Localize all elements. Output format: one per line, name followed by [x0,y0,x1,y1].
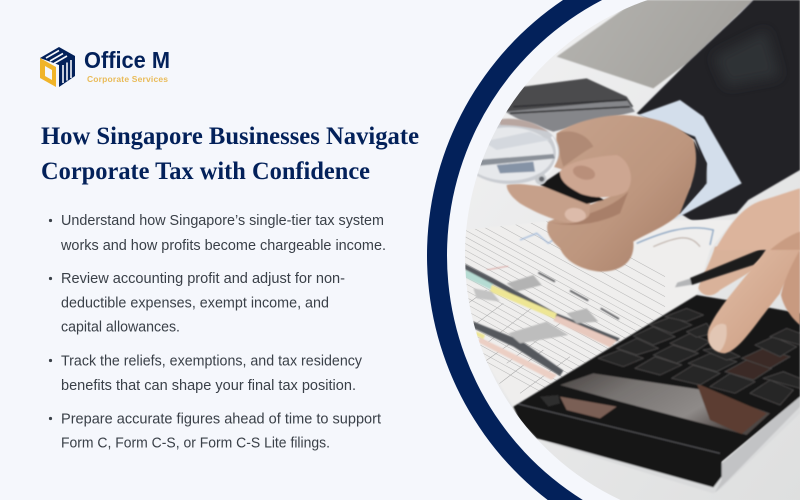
logo [40,47,170,87]
desk [466,0,800,500]
bullet 1 [49,213,386,254]
sketch charts on paper [520,228,713,247]
palm and lower fingers [547,115,696,272]
knuckle crease [557,131,593,167]
title [41,123,419,185]
display [560,373,770,435]
bullet 2: capital allowances. [61,320,180,336]
upper hand [715,188,800,250]
index finger [708,248,800,353]
title: How Singapore Businesses Navigate [41,123,419,150]
magnifier handle [540,172,604,204]
index finger [507,184,590,223]
navy arc [427,0,602,500]
wrist shadow [678,140,708,214]
bullet 2: deductible expenses, exempt income, and [61,296,329,312]
back finger [698,247,767,295]
company name: Office M [84,47,170,73]
icon: logo cube [40,47,75,87]
bullet 2: Review accounting profit and adjust for non- [61,271,345,287]
bullet list [49,213,386,452]
title: Corporate Tax with Confidence [41,158,370,185]
magnifier lens [477,118,560,186]
finger gap shadow [560,193,628,225]
red mark [487,266,508,270]
bullet 3: Track the reliefs, exemptions, and tax residency [61,354,363,370]
keypad [598,308,800,405]
bands [465,264,620,380]
photo: hands with magnifier and calculator [465,0,800,500]
ruled lines [465,222,665,391]
black base [513,295,800,487]
wall [557,0,753,88]
front highlight [518,404,720,453]
paper with spreadsheet [465,219,730,394]
bullet 3: benefits that can shape your final tax position. [61,378,356,394]
suit [637,0,800,222]
fingernail [709,324,727,352]
notebook [503,78,635,132]
thumb [560,155,631,197]
bullet 1: Understand how Singapore’s single-tier tax system [61,213,384,229]
calculator [513,247,800,493]
silver side [538,439,721,490]
third finger [781,250,800,325]
bullet 1: works and how profits become chargeable income. [60,238,386,254]
bullet 4: Prepare accurate figures ahead of time to support [61,412,381,428]
bullet 4 [49,412,381,452]
cuff [638,100,742,220]
left hand [507,115,696,272]
bullet 4: Form C, Form C-S, or Form C-S Lite filings. [61,436,330,452]
bullet 3 [49,354,363,394]
pen [675,247,768,287]
right hand [698,247,767,295]
tagline: Corporate Services [87,74,168,84]
small column labels [538,273,619,319]
bullet 2 [49,271,345,336]
